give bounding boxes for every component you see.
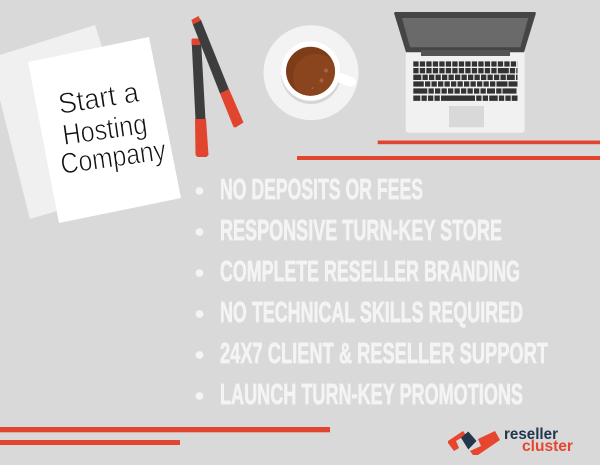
laptop base	[406, 50, 525, 133]
logo: reseller cluster	[448, 426, 573, 455]
decorative red line: bottom long	[0, 427, 330, 432]
feature list	[196, 174, 548, 411]
laptop screen	[402, 18, 528, 47]
logo mark	[448, 431, 500, 455]
handwritten title: Hosting	[61, 108, 149, 152]
icon: laptop	[394, 12, 536, 133]
front sheet of paper	[28, 37, 181, 223]
pen: upright	[192, 38, 208, 157]
coffee	[286, 47, 335, 96]
papers with handwritten note	[0, 25, 181, 223]
handwritten title	[56, 77, 168, 181]
keyboard	[413, 64, 518, 98]
list item 1	[196, 174, 423, 206]
list item 2	[196, 215, 502, 247]
back sheet of paper	[0, 25, 102, 219]
decorative red line: top long	[297, 156, 600, 160]
saucer	[264, 25, 358, 120]
pen: tilted	[191, 16, 244, 128]
cup handle	[335, 76, 351, 82]
handwritten title: Start a	[56, 77, 142, 121]
handwritten title: Company	[59, 134, 168, 181]
decorative red line: top short	[378, 140, 600, 144]
list item 1: NO DEPOSITS OR FEES	[220, 174, 423, 206]
cup shadow	[281, 44, 341, 104]
cup	[281, 41, 340, 101]
logo wordmark: reseller	[504, 426, 558, 443]
decorative red line: bottom short	[0, 440, 180, 445]
icon: pens	[191, 16, 244, 157]
laptop lid	[394, 12, 536, 52]
trackpad	[449, 106, 484, 127]
logo: reseller cluster: cluster	[522, 438, 573, 455]
icon: coffee cup on saucer	[264, 25, 358, 120]
laptop hinge	[421, 50, 510, 56]
